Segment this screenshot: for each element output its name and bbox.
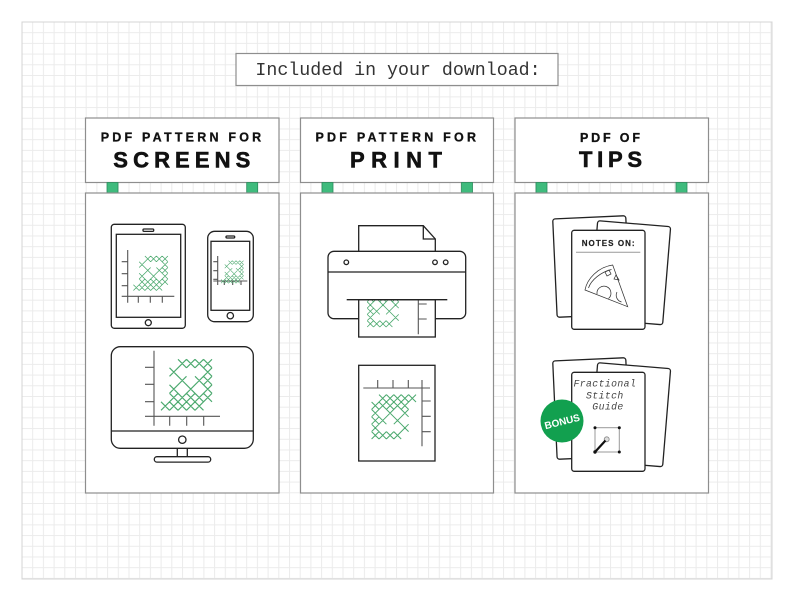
notes heading: NOTES ON: — [582, 239, 636, 248]
guide title: Guide — [592, 401, 624, 412]
bonus badge — [540, 400, 584, 442]
panel body — [515, 193, 708, 493]
title box: Included in your download: — [255, 61, 541, 81]
icon: fractional stitch guide pages — [553, 358, 671, 471]
connector tabs — [107, 182, 258, 193]
heading: pdf pattern for screens: PDF PATTERN FOR — [101, 130, 261, 144]
guide title: Stitch — [586, 390, 624, 401]
stitch diagram — [593, 426, 621, 454]
panel body — [300, 193, 494, 493]
icon: pizza slice — [585, 265, 628, 307]
icon: printer — [328, 226, 466, 337]
heading: pdf of tips — [515, 118, 708, 182]
heading: pdf of tips: PDF OF — [580, 131, 640, 145]
icon: printed sheet — [359, 365, 435, 461]
connector tabs — [536, 182, 687, 193]
heading: pdf pattern for print — [300, 118, 494, 182]
heading: pdf pattern for print: PRINT — [350, 148, 443, 173]
title box — [236, 54, 558, 86]
icon: tablet — [111, 224, 185, 328]
icon: desktop monitor — [111, 347, 253, 462]
panel: tips — [515, 118, 708, 493]
panel: print — [300, 118, 494, 493]
connector tabs — [322, 182, 472, 193]
heading: pdf of tips: TIPS — [579, 147, 642, 172]
icon: phone — [208, 231, 253, 322]
panel body — [86, 193, 279, 493]
guide title: Fractional — [573, 379, 636, 390]
panel: screens — [86, 118, 279, 493]
bonus badge: BONUS — [544, 413, 582, 432]
heading: pdf pattern for print: PDF PATTERN FOR — [316, 130, 476, 144]
heading: pdf pattern for screens: SCREENS — [113, 148, 250, 173]
heading: pdf pattern for screens — [86, 118, 279, 182]
icon: notes on pizza pages — [553, 216, 671, 329]
